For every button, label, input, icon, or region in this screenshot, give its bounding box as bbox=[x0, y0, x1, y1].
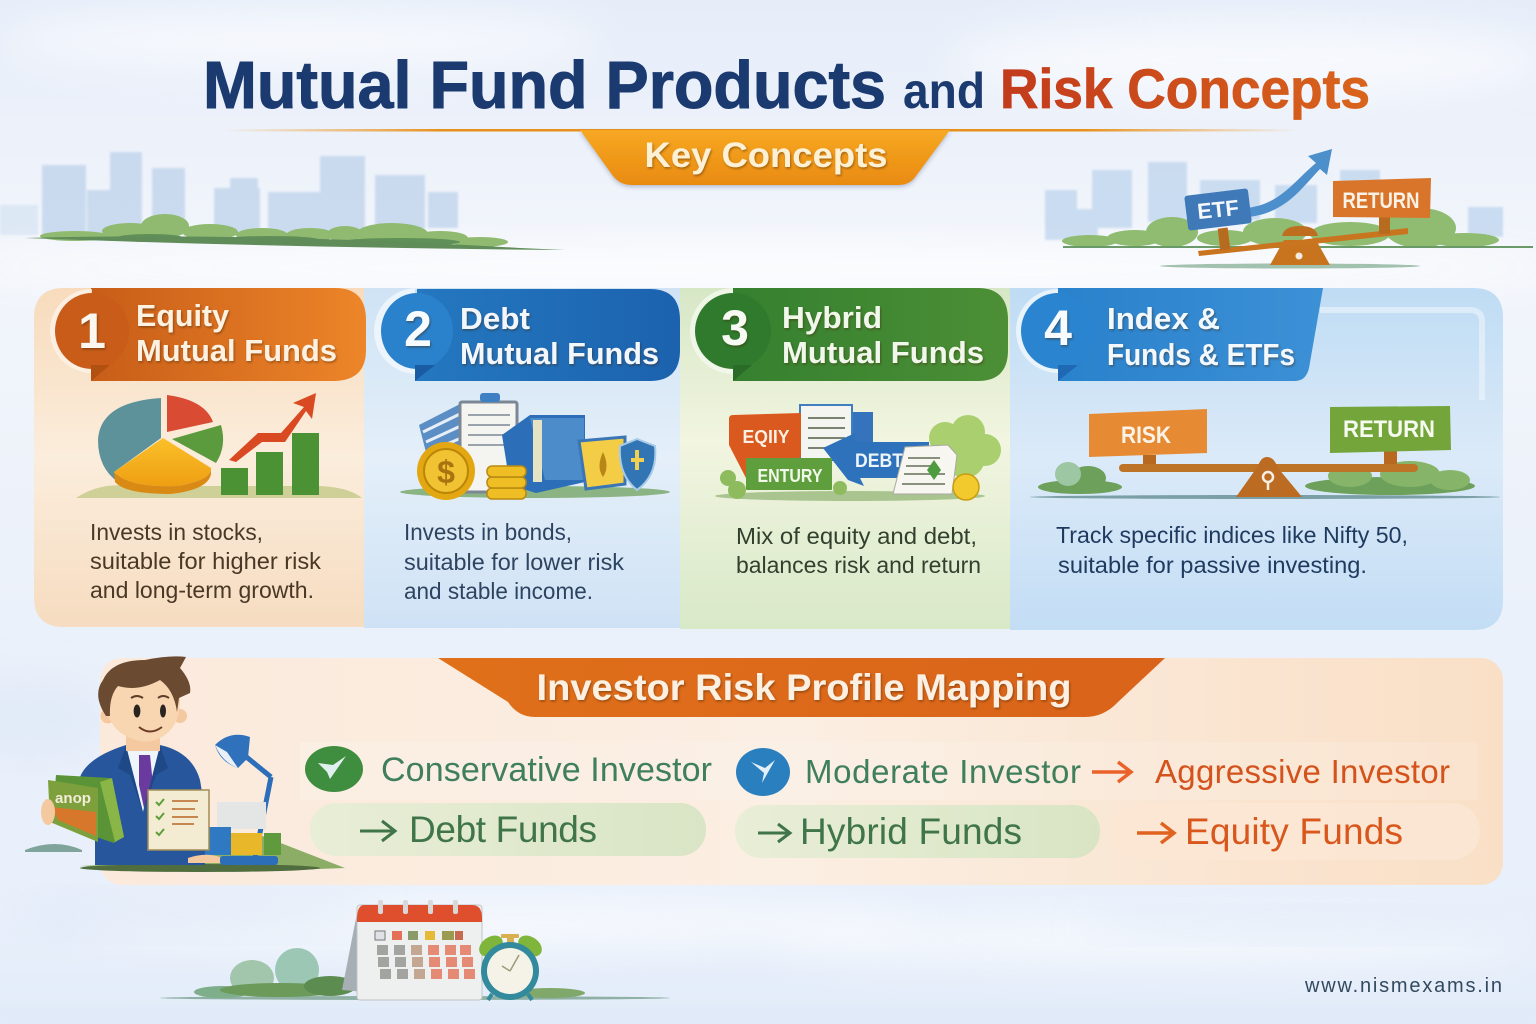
text: hybrid description: Mix of equity and debt, bbox=[736, 523, 977, 549]
panel 4 background: index funds and ETFs bbox=[1010, 288, 1503, 630]
icon: green book: anop bbox=[55, 790, 91, 807]
heading: index funds and ETFs: 4 bbox=[1044, 300, 1072, 356]
pill: hybrid funds bbox=[735, 805, 1100, 858]
icon: pie chart and bars bbox=[76, 393, 362, 498]
icon: seesaw base bbox=[1198, 216, 1408, 265]
text: hybrid description: balances risk and return bbox=[736, 552, 981, 578]
panel 1: equity mutual funds bbox=[50, 288, 366, 603]
stacked files and boxes bbox=[204, 802, 281, 855]
icon: risk and return balance bbox=[1030, 406, 1500, 499]
icon: growth arrow bbox=[1246, 149, 1332, 217]
text: hybrid description bbox=[736, 523, 981, 578]
label: equity funds: Equity Funds bbox=[1185, 811, 1403, 852]
pill: equity funds bbox=[1110, 803, 1480, 860]
bushes and ground bbox=[160, 948, 670, 1000]
decorative inner frame bbox=[1320, 310, 1482, 400]
footer: website: www.nismexams.in bbox=[1304, 975, 1502, 997]
panel: investor risk profile mapping bbox=[100, 658, 1503, 885]
heading: index funds and ETFs: Funds & ETFs bbox=[1107, 337, 1295, 372]
heading: debt mutual funds: Mutual Funds bbox=[460, 336, 659, 371]
heading: debt mutual funds bbox=[374, 288, 680, 381]
subtitle ribbon: key concepts bbox=[225, 129, 1300, 185]
text: debt description: suitable for lower risk bbox=[404, 549, 624, 575]
icon: documents, book, coins and shield: $ bbox=[437, 454, 455, 490]
icon: documents, book, coins and shield bbox=[400, 393, 670, 500]
heading: equity mutual funds: 1 bbox=[78, 303, 106, 359]
sign: ETF: ETF bbox=[1196, 195, 1240, 224]
label: debt funds: Debt Funds bbox=[409, 809, 597, 850]
heading: hybrid mutual funds: Mutual Funds bbox=[782, 335, 984, 370]
label: conservative investor: Conservative Investor bbox=[381, 751, 712, 789]
panel 3: hybrid mutual funds bbox=[690, 288, 1008, 578]
icon: checklist clipboard bbox=[148, 790, 220, 863]
heading: index funds and ETFs bbox=[1016, 288, 1323, 381]
icon: equity and debt mix: DEBT bbox=[855, 451, 903, 472]
heading: hybrid mutual funds: Hybrid bbox=[782, 300, 882, 335]
heading: hybrid mutual funds: 3 bbox=[721, 300, 749, 356]
right skyline with seesaw bbox=[1045, 149, 1533, 268]
sign: return: RETURN bbox=[1342, 188, 1420, 213]
text: index funds description: Track specific indices like Nifty 50, bbox=[1056, 522, 1408, 548]
calendar bbox=[342, 900, 482, 1000]
text: index funds description bbox=[1056, 522, 1408, 578]
arrow: moderate to aggressive bbox=[1092, 762, 1131, 782]
pill: debt funds bbox=[310, 803, 706, 856]
text: equity description: suitable for higher risk bbox=[90, 548, 322, 574]
subtitle ribbon: key concepts: Key Concepts bbox=[644, 136, 888, 175]
heading ribbon: investor risk profile mapping: Investor Risk Profile Mapping bbox=[536, 667, 1072, 708]
left skyline with trees bbox=[0, 152, 565, 250]
icon: equity and debt mix: EQIIY bbox=[742, 427, 790, 447]
sign: return bbox=[1333, 178, 1431, 218]
title: Risk Concepts bbox=[1000, 57, 1370, 120]
title bbox=[203, 48, 1370, 123]
suit and shirt bbox=[79, 745, 205, 865]
sign: return bbox=[1330, 406, 1451, 453]
label: hybrid funds: Hybrid Funds bbox=[800, 811, 1022, 852]
label: moderate investor: Moderate Investor bbox=[805, 753, 1081, 790]
heading: equity mutual funds: Mutual Funds bbox=[136, 333, 337, 368]
illustration: investor with books and lamp bbox=[25, 656, 345, 872]
text: debt description: and stable income. bbox=[404, 578, 593, 604]
panel 2 background: debt bbox=[364, 288, 680, 628]
panel 3 background: hybrid bbox=[680, 288, 1010, 629]
sign: risk: RISK bbox=[1121, 422, 1172, 449]
text: debt description bbox=[404, 519, 624, 604]
text: equity description: and long-term growth. bbox=[90, 577, 314, 603]
panel 1 background: equity bbox=[34, 288, 364, 627]
heading: debt mutual funds: Debt bbox=[460, 301, 530, 336]
sign: return: RETURN bbox=[1343, 416, 1435, 443]
text: debt description: Invests in bonds, bbox=[404, 519, 572, 545]
sign: risk bbox=[1089, 409, 1207, 457]
icon: moderate check badge bbox=[736, 748, 790, 796]
alarm clock bbox=[475, 931, 546, 1000]
icon: green book bbox=[41, 775, 124, 843]
face and hair bbox=[98, 656, 190, 751]
sign: ETF bbox=[1184, 188, 1252, 231]
panel group: fund categories bbox=[34, 288, 1503, 630]
title: Mutual Fund Products bbox=[203, 48, 886, 123]
title: and bbox=[903, 63, 985, 119]
heading ribbon: investor risk profile mapping bbox=[438, 658, 1165, 717]
label: aggressive investor: Aggressive Investor bbox=[1155, 753, 1450, 790]
heading: index funds and ETFs: Index & bbox=[1107, 301, 1220, 336]
text: equity description: Invests in stocks, bbox=[90, 519, 263, 545]
heading: hybrid mutual funds bbox=[690, 288, 1008, 381]
row band bbox=[300, 742, 1478, 800]
panel 2: debt mutual funds bbox=[374, 288, 680, 604]
text: index funds description: suitable for passive investing. bbox=[1058, 552, 1367, 578]
icon: conservative check badge bbox=[305, 746, 363, 792]
text: equity description bbox=[90, 519, 322, 603]
panel 4: index funds and ETFs bbox=[1016, 288, 1500, 578]
icon: equity and debt mix bbox=[715, 405, 1001, 501]
icon: equity and debt mix: ENTURY bbox=[758, 466, 822, 486]
heading: debt mutual funds: 2 bbox=[404, 301, 432, 357]
illustration: calendar and alarm clock bbox=[160, 900, 670, 1000]
heading: equity mutual funds bbox=[50, 288, 366, 381]
heading: equity mutual funds: Equity bbox=[136, 298, 230, 333]
lamp bbox=[215, 735, 278, 865]
